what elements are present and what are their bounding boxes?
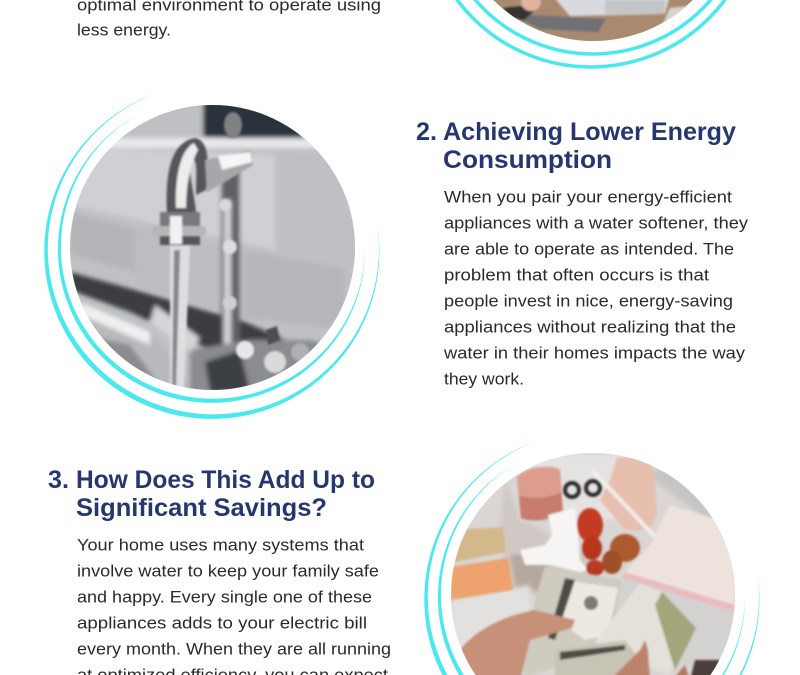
ring: faucet inner arc — [58, 115, 365, 403]
heading: section 2: Consumption — [443, 146, 612, 174]
text block: section 2 body: water in their homes impacts the way — [443, 344, 746, 362]
text block: section 2 body: people invest in nice, energy-saving — [444, 292, 733, 310]
text block: section 3 body — [77, 536, 391, 675]
text block: end of intro section: less energy. — [77, 22, 171, 40]
heading: section 3: Significant Savings? — [76, 494, 327, 522]
text block: section 2 body: appliances with a water softener, they — [444, 214, 749, 232]
text block: section 2 body — [443, 188, 749, 388]
text block: section 3 body: every month. When they are all running — [77, 640, 391, 658]
heading: section 3: How Does This Add Up to — [76, 466, 375, 494]
image: hands counting money in circle — [450, 452, 736, 675]
text block: section 2 body: they work. — [444, 370, 524, 388]
text block: section 2 body: appliances without realizing that the — [444, 318, 736, 336]
hand with pen — [600, 455, 657, 530]
text block: section 3 body: involve water to keep your family safe — [77, 562, 379, 580]
scissors — [565, 483, 579, 497]
dollar bills — [523, 567, 622, 675]
cotton — [520, 508, 588, 572]
ring: money outer arc — [424, 441, 759, 675]
ring: top image inner arc — [438, 0, 748, 54]
brown yarn — [610, 534, 640, 562]
ring: top image outer arc — [424, 0, 758, 67]
text block: end of intro section — [77, 0, 381, 40]
image: chrome faucet in circle — [70, 100, 370, 392]
heading: section 2: 2. — [416, 118, 437, 146]
pink cup — [518, 491, 564, 522]
heading: section 3: 3. — [48, 466, 69, 494]
notebook — [625, 505, 735, 605]
faucet spout — [167, 138, 208, 212]
text block: section 3 body: and happy. Every single one of these — [77, 588, 372, 606]
text block: section 2 body: problem that often occurs is that — [444, 266, 709, 284]
heading: section 2 — [416, 118, 736, 174]
colour swatches — [453, 527, 506, 562]
text block: section 2 body: are able to operate as intended. The — [444, 240, 734, 258]
heading: section 3 — [48, 466, 375, 522]
image: desk with calculator in circle — [493, 0, 693, 41]
text block: section 3 body: appliances adds to your electric bill — [77, 614, 367, 632]
text block: section 3 body: Your home uses many systems that — [77, 536, 364, 554]
red yarn — [577, 508, 603, 542]
text block: section 2 body: When you pair your energy-efficient — [444, 188, 732, 206]
ring: faucet outer arc — [44, 93, 379, 419]
hands — [460, 610, 575, 675]
ring: money inner arc — [438, 463, 745, 675]
heading: section 2: Achieving Lower Energy — [443, 118, 736, 146]
